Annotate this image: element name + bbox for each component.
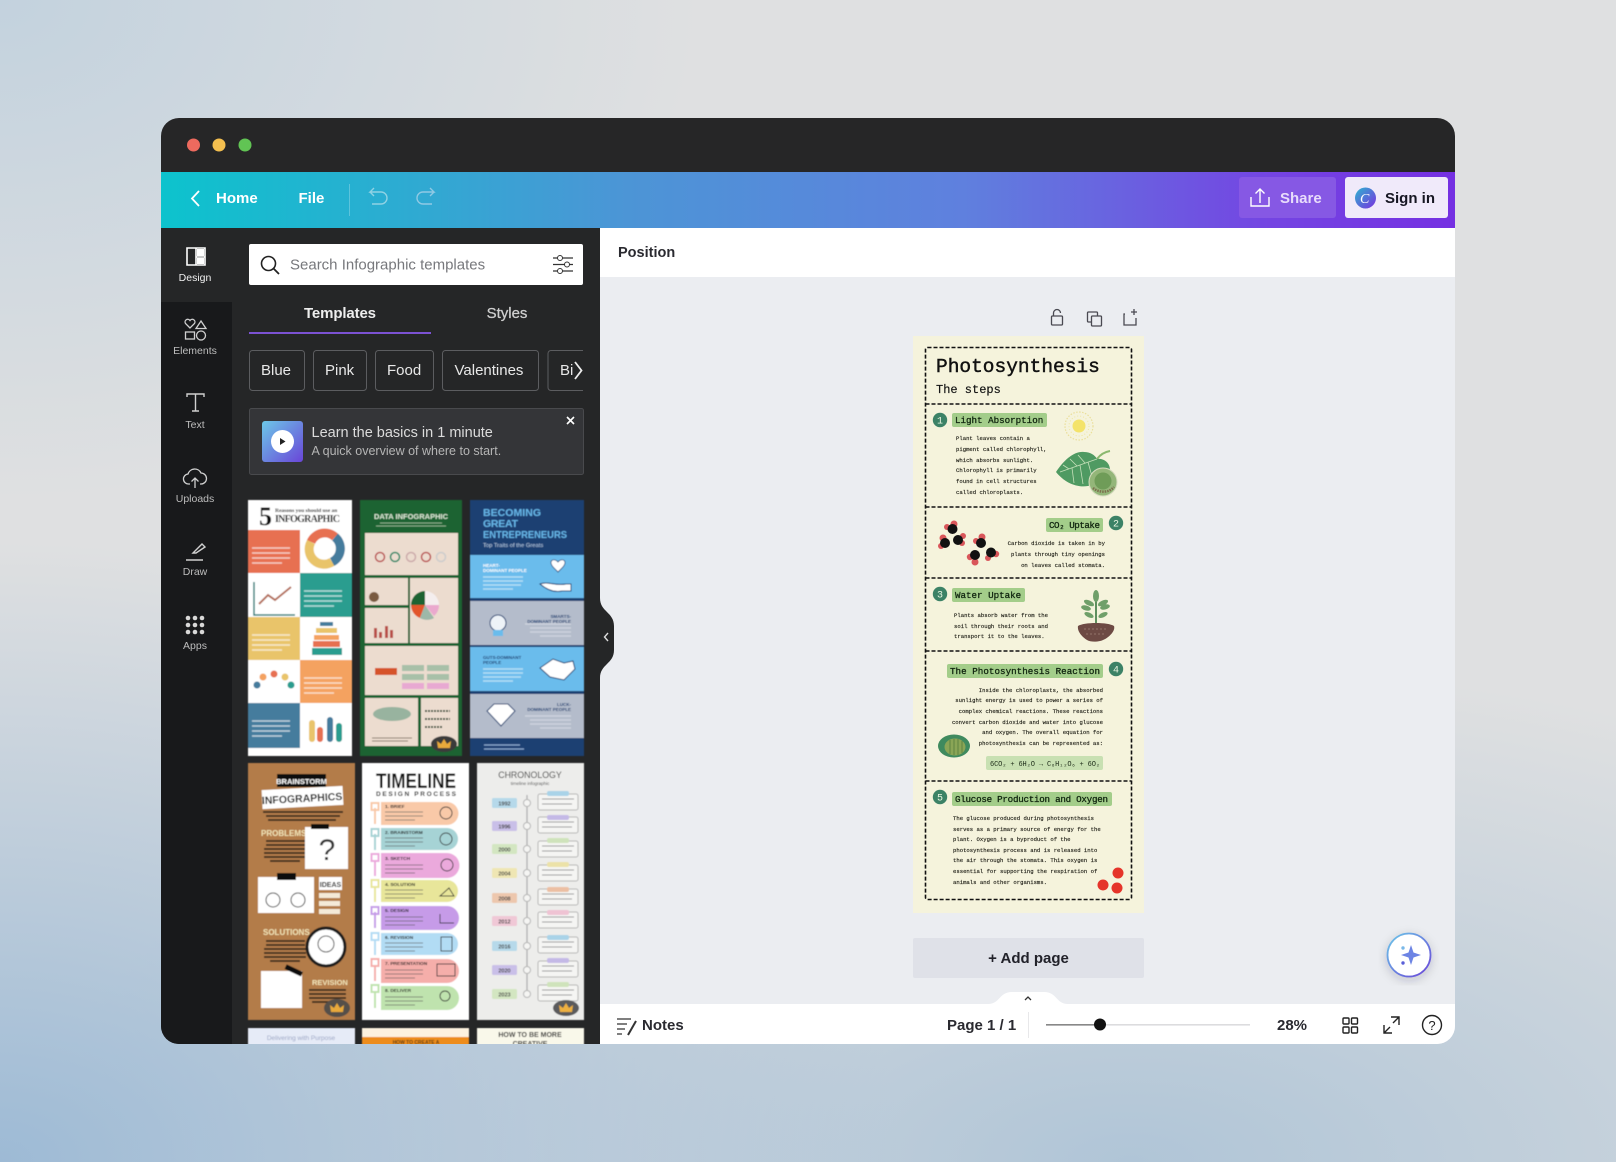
template: chronology timeline: timeline infographic [511,781,550,786]
top toolbar [161,172,1455,228]
back chevron and home link [192,190,258,207]
template: brainstorm infographics: SOLUTIONS [263,928,310,937]
search box [249,244,583,285]
step 2: co2 uptake [938,516,1123,569]
tabs: Templates [304,305,376,322]
template: chronology timeline: 1992 [498,802,511,808]
template: timeline design process: 6. REVISION [385,935,414,941]
rail item: uploads: Uploads [176,493,214,505]
step 2: co2 uptake: on leaves called stomata. [1021,562,1105,569]
title bar [161,118,1455,172]
template: 5 reasons infographic: INFOGRAPHIC [275,514,340,525]
position toolbar: Position [618,245,675,261]
template: becoming great entrepreneurs: DOMINANT PEOPLE [483,568,527,573]
step 1: light absorption: Plant leaves contain a [956,435,1030,442]
template: chronology timeline: 2016 [498,944,511,950]
step 1: light absorption: 1 [937,416,943,428]
left panel [161,228,600,1048]
icon: carbon dioxide molecules [938,520,999,566]
template: brainstorm infographics [248,763,355,1020]
filter chips: Pink [325,362,355,379]
template: becoming great entrepreneurs: HEART- [483,563,500,568]
template: becoming great entrepreneurs: LUCK- [557,702,571,707]
template: chronology timeline: 2020 [498,968,511,974]
template: chronology timeline: 2023 [498,992,511,998]
tabs [249,305,527,334]
rail item: uploads [176,469,214,505]
step 3: water uptake: soil through their roots and [954,623,1048,630]
template: timeline design process: 7. PRESENTATION [385,961,428,967]
panel collapse handle [600,598,614,678]
template: data infographic [360,500,462,756]
icon: chloroplast oval [938,734,970,758]
fullscreen icon [1384,1017,1399,1033]
template: chronology timeline: 2012 [498,920,511,926]
sign in button [1345,177,1448,218]
template: data infographic: DATA INFOGRAPHIC [374,512,449,521]
template: timeline design process: 8. DELIVER [385,988,412,994]
rail item: draw [183,544,208,578]
template: brainstorm infographics: REVISION [312,978,348,987]
add page button [913,938,1144,978]
step 4: the photosynthesis reaction: convert carbon dioxide and water into glucose [952,719,1103,726]
template: chronology timeline: 2000 [498,848,511,854]
step 5: glucose production and oxygen: The glucose produced during photosynthesis [953,815,1094,822]
template: 5 reasons infographic: Reasons you should use an [275,508,337,514]
equation [986,756,1103,770]
template: timeline design process [362,763,469,1020]
tabs: Styles [487,305,527,322]
template: timeline design process: DESIGN PROCESS [376,791,457,798]
rail item: elements [173,319,217,357]
notes: Notes [642,1017,684,1034]
step 4: the photosynthesis reaction: 4 [1113,666,1119,676]
template: timeline design process: 3. SKETCH [385,856,411,862]
rail item: design: Design [179,272,212,284]
rail item: apps: Apps [183,640,207,652]
template: timeline design process: 1. BRIEF [385,804,405,810]
rail item: design [179,248,212,284]
step 1: light absorption: which absorbs sunlight. [956,457,1033,464]
sign in button: Sign in [1385,190,1435,207]
step 3: water uptake: Plants absorb water from the [954,612,1048,619]
template: becoming great entrepreneurs [470,500,584,756]
icon: leaf with chloroplast [1056,451,1117,496]
dashed frames [926,348,1132,900]
template: 5 reasons infographic [248,500,352,756]
template: brainstorm infographics: ? [319,834,335,867]
step 1: light absorption: Light Absorption [955,415,1043,426]
step 4: the photosynthesis reaction: sunlight energy is used to power a series of [955,697,1103,704]
step 2: co2 uptake: Carbon dioxide is taken in by [1008,540,1106,547]
template: 5 reasons infographic: 5 [259,502,272,531]
share button [1239,177,1336,218]
equation: 6CO₂ + 6H₂O → C₆H₁₂O₆ + 6O₂ [990,761,1100,769]
page title: The steps [936,383,1001,397]
premium crown badge [431,736,457,752]
filter chips [250,350,583,390]
rail item: draw: Draw [183,566,208,578]
step 4: the photosynthesis reaction: and oxygen. The overall equation for [982,729,1103,736]
step 1: light absorption: called chloroplasts. [956,489,1023,496]
template: timeline design process: 2. BRAINSTORM [385,830,423,836]
icon: oxygen dots [1098,868,1124,894]
template: brainstorm infographics: PROBLEMS [261,829,307,838]
premium crown badge [553,1000,579,1016]
learn the basics card: A quick overview of where to start. [312,444,501,458]
step 5: glucose production and oxygen [933,790,1124,894]
step 5: glucose production and oxygen: essential for supporting the respiration of [953,868,1097,875]
rail item: elements: Elements [173,345,217,357]
magic assistant button [1388,934,1430,976]
partially visible templates row: HOW TO CREATE A [393,1040,440,1046]
share button: Share [1280,190,1322,207]
premium crown badge [324,999,350,1017]
template: becoming great entrepreneurs: BECOMING [483,507,541,519]
template: becoming great entrepreneurs: GUTS-DOMINANT [483,655,521,660]
step 1: light absorption: found in cell structures [956,478,1037,485]
search box: Search Infographic templates [290,256,485,274]
step 4: the photosynthesis reaction: The Photosynthesis Reaction [950,666,1100,677]
learn the basics card [250,408,584,474]
play icon [262,421,303,462]
page title: Photosynthesis [936,356,1100,378]
step 3: water uptake: transport it to the leaves. [954,633,1045,640]
position toolbar [600,228,1455,277]
template: brainstorm infographics: BRAINSTORM [276,777,327,786]
template: chronology timeline [477,763,584,1020]
partially visible templates row [247,1028,585,1044]
template: becoming great entrepreneurs: Top Traits of the Greats [483,543,543,549]
step 2: co2 uptake: plants through tiny openings [1011,551,1105,558]
template: becoming great entrepreneurs: SMARTS- [550,614,571,619]
undo icon [370,188,387,204]
step 1: light absorption: pigment called chlorophyll, [956,446,1047,453]
step 5: glucose production and oxygen: plant. Oxygen is a byproduct of the [953,836,1070,843]
filter chips: Bi [560,362,573,379]
step 3: water uptake: 3 [937,590,943,602]
step 2: co2 uptake: CO₂ Uptake [1049,520,1100,531]
help icon: ? [1428,1018,1436,1033]
learn the basics card: Learn the basics in 1 minute [312,425,493,441]
step 3: water uptake [933,587,1114,642]
template: timeline design process: 5. DESIGN [385,908,409,914]
template: becoming great entrepreneurs: GREAT [483,518,519,530]
photosynthesis page [913,336,1144,913]
template: becoming great entrepreneurs: PEOPLE [483,660,501,665]
step 2: co2 uptake: 2 [1113,520,1119,530]
partially visible templates row: CREATIVE [513,1041,548,1048]
page indicator: Page 1 / 1 [947,1017,1016,1034]
step 4: the photosynthesis reaction: complex chemical reactions. These reactions [959,708,1103,715]
partially visible templates row: HOW TO BE MORE [498,1032,562,1039]
step 5: glucose production and oxygen: animals and other organisms. [953,879,1047,886]
help icon [1422,1016,1442,1034]
icon rail [161,248,232,1044]
bottom status bar [600,992,1455,1044]
rail item: text: Text [185,419,205,431]
zoom percent: 28% [1277,1017,1307,1034]
template: timeline design process: TIMELINE [376,770,456,793]
step 5: glucose production and oxygen: serves as a primary source of energy for the [953,826,1101,833]
template: becoming great entrepreneurs: DOMINANT PEOPLE [527,707,571,712]
page title [936,356,1100,397]
step 1: light absorption: Chlorophyll is primarily [956,467,1037,474]
rail item: apps [183,616,207,652]
main canvas area [600,228,1455,1044]
template: brainstorm infographics: IDEAS [320,882,342,889]
filter chips: Valentines [454,362,523,379]
notes [617,1017,684,1035]
add page button: + Add page [988,950,1069,967]
filter chips: Food [387,362,421,379]
template: becoming great entrepreneurs: DOMINANT PEOPLE [527,619,571,624]
icon: sun [1065,412,1093,440]
grid view icon [1343,1018,1358,1033]
zoom slider [1046,1018,1250,1030]
template: chronology timeline: 2004 [498,872,512,878]
step 4: the photosynthesis reaction: Inside the chloroplasts, the absorbed [979,687,1103,694]
template: chronology timeline: CHRONOLOGY [498,770,562,780]
step 4: the photosynthesis reaction [938,662,1123,770]
template: becoming great entrepreneurs: ENTREPRENEURS [483,529,567,541]
partially visible templates row: Delivering with Purpose [267,1035,336,1042]
redo icon [417,188,434,204]
sign in button: C [1360,192,1370,207]
template: brainstorm infographics: INFOGRAPHICS [262,791,343,807]
page action icons [1052,309,1137,326]
template: chronology timeline: 1996 [498,824,511,830]
filter chips: Blue [261,362,291,379]
application window mockup [161,118,1455,1044]
template: timeline design process: 4. SOLUTION [385,882,416,888]
file menu: File [298,190,324,207]
step 4: the photosynthesis reaction: photosynthesis can be represented as: [979,740,1103,747]
step 3: water uptake: Water Uptake [955,590,1021,601]
rail item: text [185,394,205,431]
step 1: light absorption [933,412,1117,496]
template: chronology timeline: 2008 [498,896,511,902]
back chevron and home link: Home [216,190,258,207]
step 5: glucose production and oxygen: 5 [937,794,943,804]
step 5: glucose production and oxygen: photosynthesis process and is released into [953,847,1097,854]
step 5: glucose production and oxygen: the air through the stomata. This oxygen is [953,857,1097,864]
icon: plant in soil [1078,590,1114,642]
step 5: glucose production and oxygen: Glucose Production and Oxygen [955,794,1108,805]
